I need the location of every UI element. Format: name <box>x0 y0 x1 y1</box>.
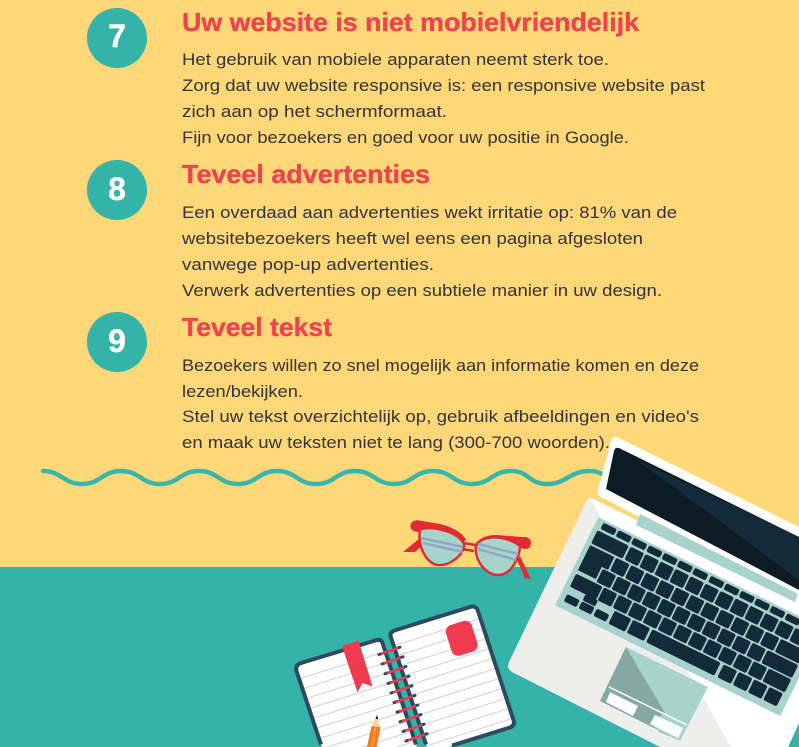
key rows <box>570 530 799 692</box>
trackpad <box>600 647 708 741</box>
icon: bookmark <box>342 640 372 692</box>
item 7 <box>87 7 705 147</box>
number badge 7 <box>87 8 147 68</box>
heading 9: Teveel tekst <box>182 312 332 342</box>
body text 9: Bezoekers willen zo snel mogelijk aan informatie komen en deze <box>182 356 699 375</box>
icon: open notebook <box>296 606 514 747</box>
heading 8: Teveel advertenties <box>182 159 430 189</box>
left page <box>296 640 417 747</box>
icon: red glasses <box>403 520 531 579</box>
icon: laptop <box>508 437 799 747</box>
body text 8: Verwerk advertenties op een subtiele manier in uw design. <box>182 281 662 300</box>
laptop screen <box>598 437 799 600</box>
wavy divider <box>43 471 602 484</box>
body text 7: Het gebruik van mobiele apparaten neemt sterk toe. <box>182 50 609 69</box>
icon: red sticker <box>444 619 479 658</box>
spiral binding <box>379 647 427 741</box>
body text 9: Stel uw tekst overzichtelijk op, gebruik afbeeldingen en video's <box>182 407 699 426</box>
number badge 8: 8 <box>108 171 126 207</box>
icon: pencil <box>367 715 380 747</box>
background desk band <box>0 567 799 747</box>
body text 7 <box>182 50 705 147</box>
item 8 <box>87 159 677 300</box>
body text 8: websitebezoekers heeft wel eens een pagina afgesloten <box>181 229 643 248</box>
keyboard <box>555 517 799 716</box>
item 9 <box>87 312 699 452</box>
body text 7: Fijn voor bezoekers en goed voor uw positie in Google. <box>182 128 629 147</box>
body text 9: en maak uw teksten niet te lang (300-700 woorden). <box>182 433 610 452</box>
body text 8: Een overdaad aan advertenties wekt irritatie op: 81% van de <box>182 203 677 222</box>
number badge 8 <box>87 160 147 220</box>
laptop base <box>508 498 799 747</box>
body text 7: Zorg dat uw website responsive is: een responsive website past <box>182 76 705 95</box>
number badge 9 <box>87 312 147 372</box>
bottom row with space bar <box>564 587 784 706</box>
hinge strip <box>636 514 798 602</box>
body text 8: vanwege pop-up advertenties. <box>182 255 434 274</box>
function key row <box>600 523 799 634</box>
body text 9: lezen/bekijken. <box>182 382 303 401</box>
body text 8 <box>181 203 677 300</box>
body text 9 <box>182 356 699 452</box>
body text 7: zich aan op het schermformaat. <box>182 102 447 121</box>
number badge 9: 9 <box>108 323 126 359</box>
number badge 7: 7 <box>108 18 126 54</box>
heading 7: Uw website is niet mobielvriendelijk <box>182 7 640 37</box>
right page <box>390 606 514 747</box>
